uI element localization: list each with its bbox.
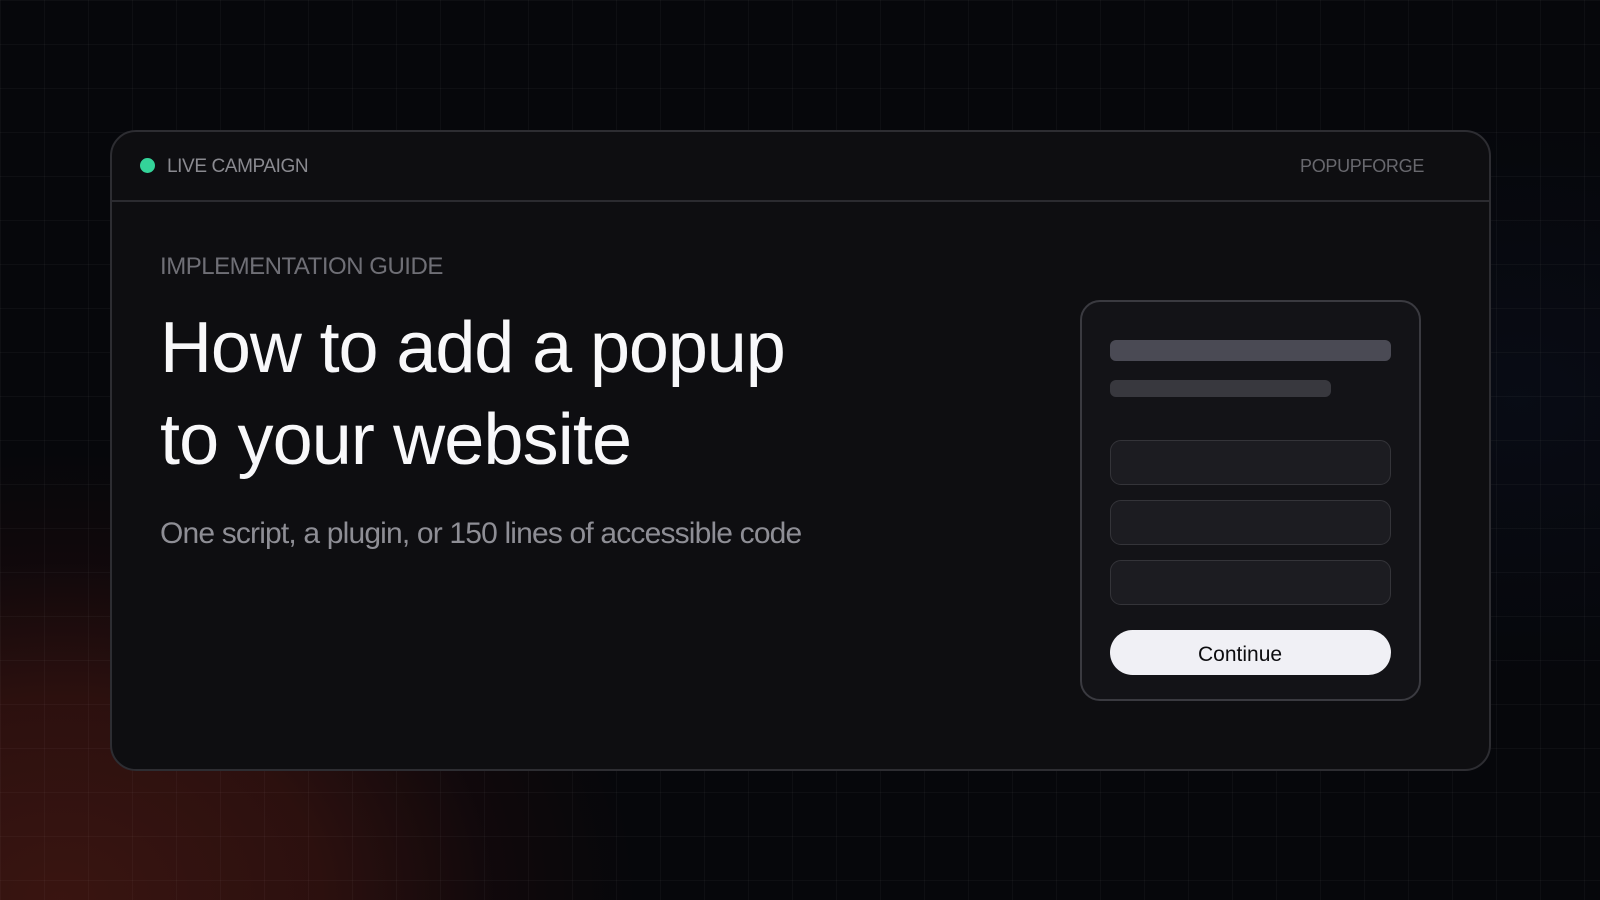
input field 1 [1110,440,1391,485]
status label: LIVE CAMPAIGN [167,156,308,177]
brand label: POPUPFORGE [1300,156,1424,176]
skeleton heading bar [1110,340,1391,361]
title: to your website [160,400,631,480]
button label: Continue [1198,643,1282,666]
status dot [140,158,155,173]
input field 3 [1110,560,1391,605]
title: How to add a popup [160,308,785,388]
button: Continue [1110,630,1391,675]
input field 2 [1110,500,1391,545]
panel: main card [110,130,1491,771]
subtitle: One script, a plugin, or 150 lines of accessible code [160,517,801,550]
panel: popup mock [1080,300,1421,701]
eyebrow: IMPLEMENTATION GUIDE [160,253,443,280]
title [160,308,785,480]
skeleton subheading bar [1110,380,1331,397]
